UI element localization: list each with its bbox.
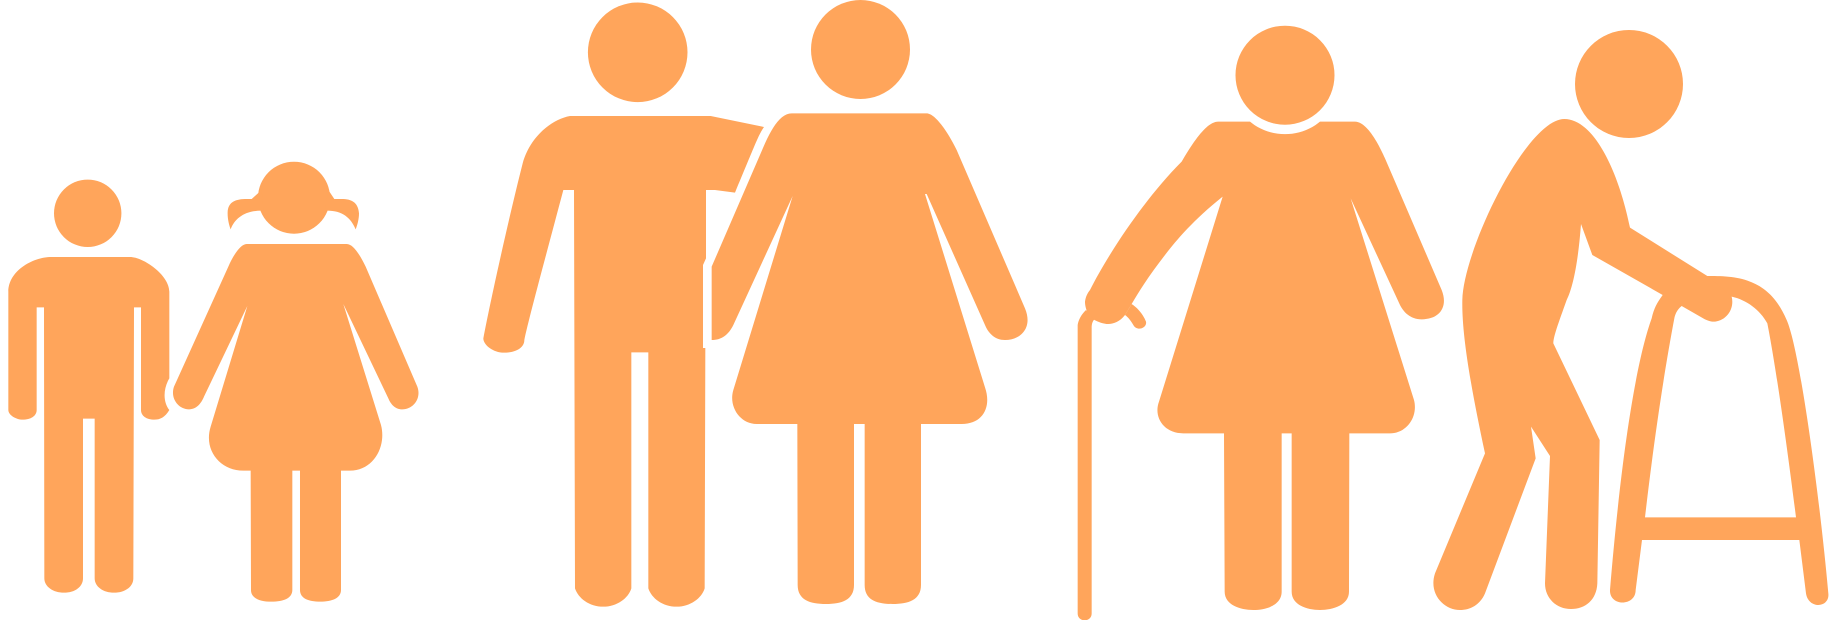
boy body (8, 257, 169, 593)
girl body and dress (173, 244, 418, 602)
elderly man body (1433, 119, 1732, 610)
figure: elderly man with walker (1433, 30, 1828, 610)
woman head (811, 0, 910, 99)
walking frame (1610, 276, 1828, 605)
elderly woman head (1236, 26, 1334, 125)
figure: girl (173, 162, 418, 602)
woman body and dress (712, 113, 1028, 604)
man body (483, 116, 764, 607)
walking cane (1078, 304, 1146, 620)
girl pigtails (228, 190, 359, 229)
figure: adult woman (712, 0, 1028, 604)
boy head (54, 180, 121, 247)
elderly man head (1575, 30, 1683, 138)
man head (588, 2, 688, 102)
figure: boy (8, 180, 169, 593)
girl head (258, 162, 330, 234)
figure: adult man (483, 2, 764, 607)
elderly woman body and dress (1085, 122, 1444, 610)
figure: elderly woman with cane (1078, 26, 1444, 620)
